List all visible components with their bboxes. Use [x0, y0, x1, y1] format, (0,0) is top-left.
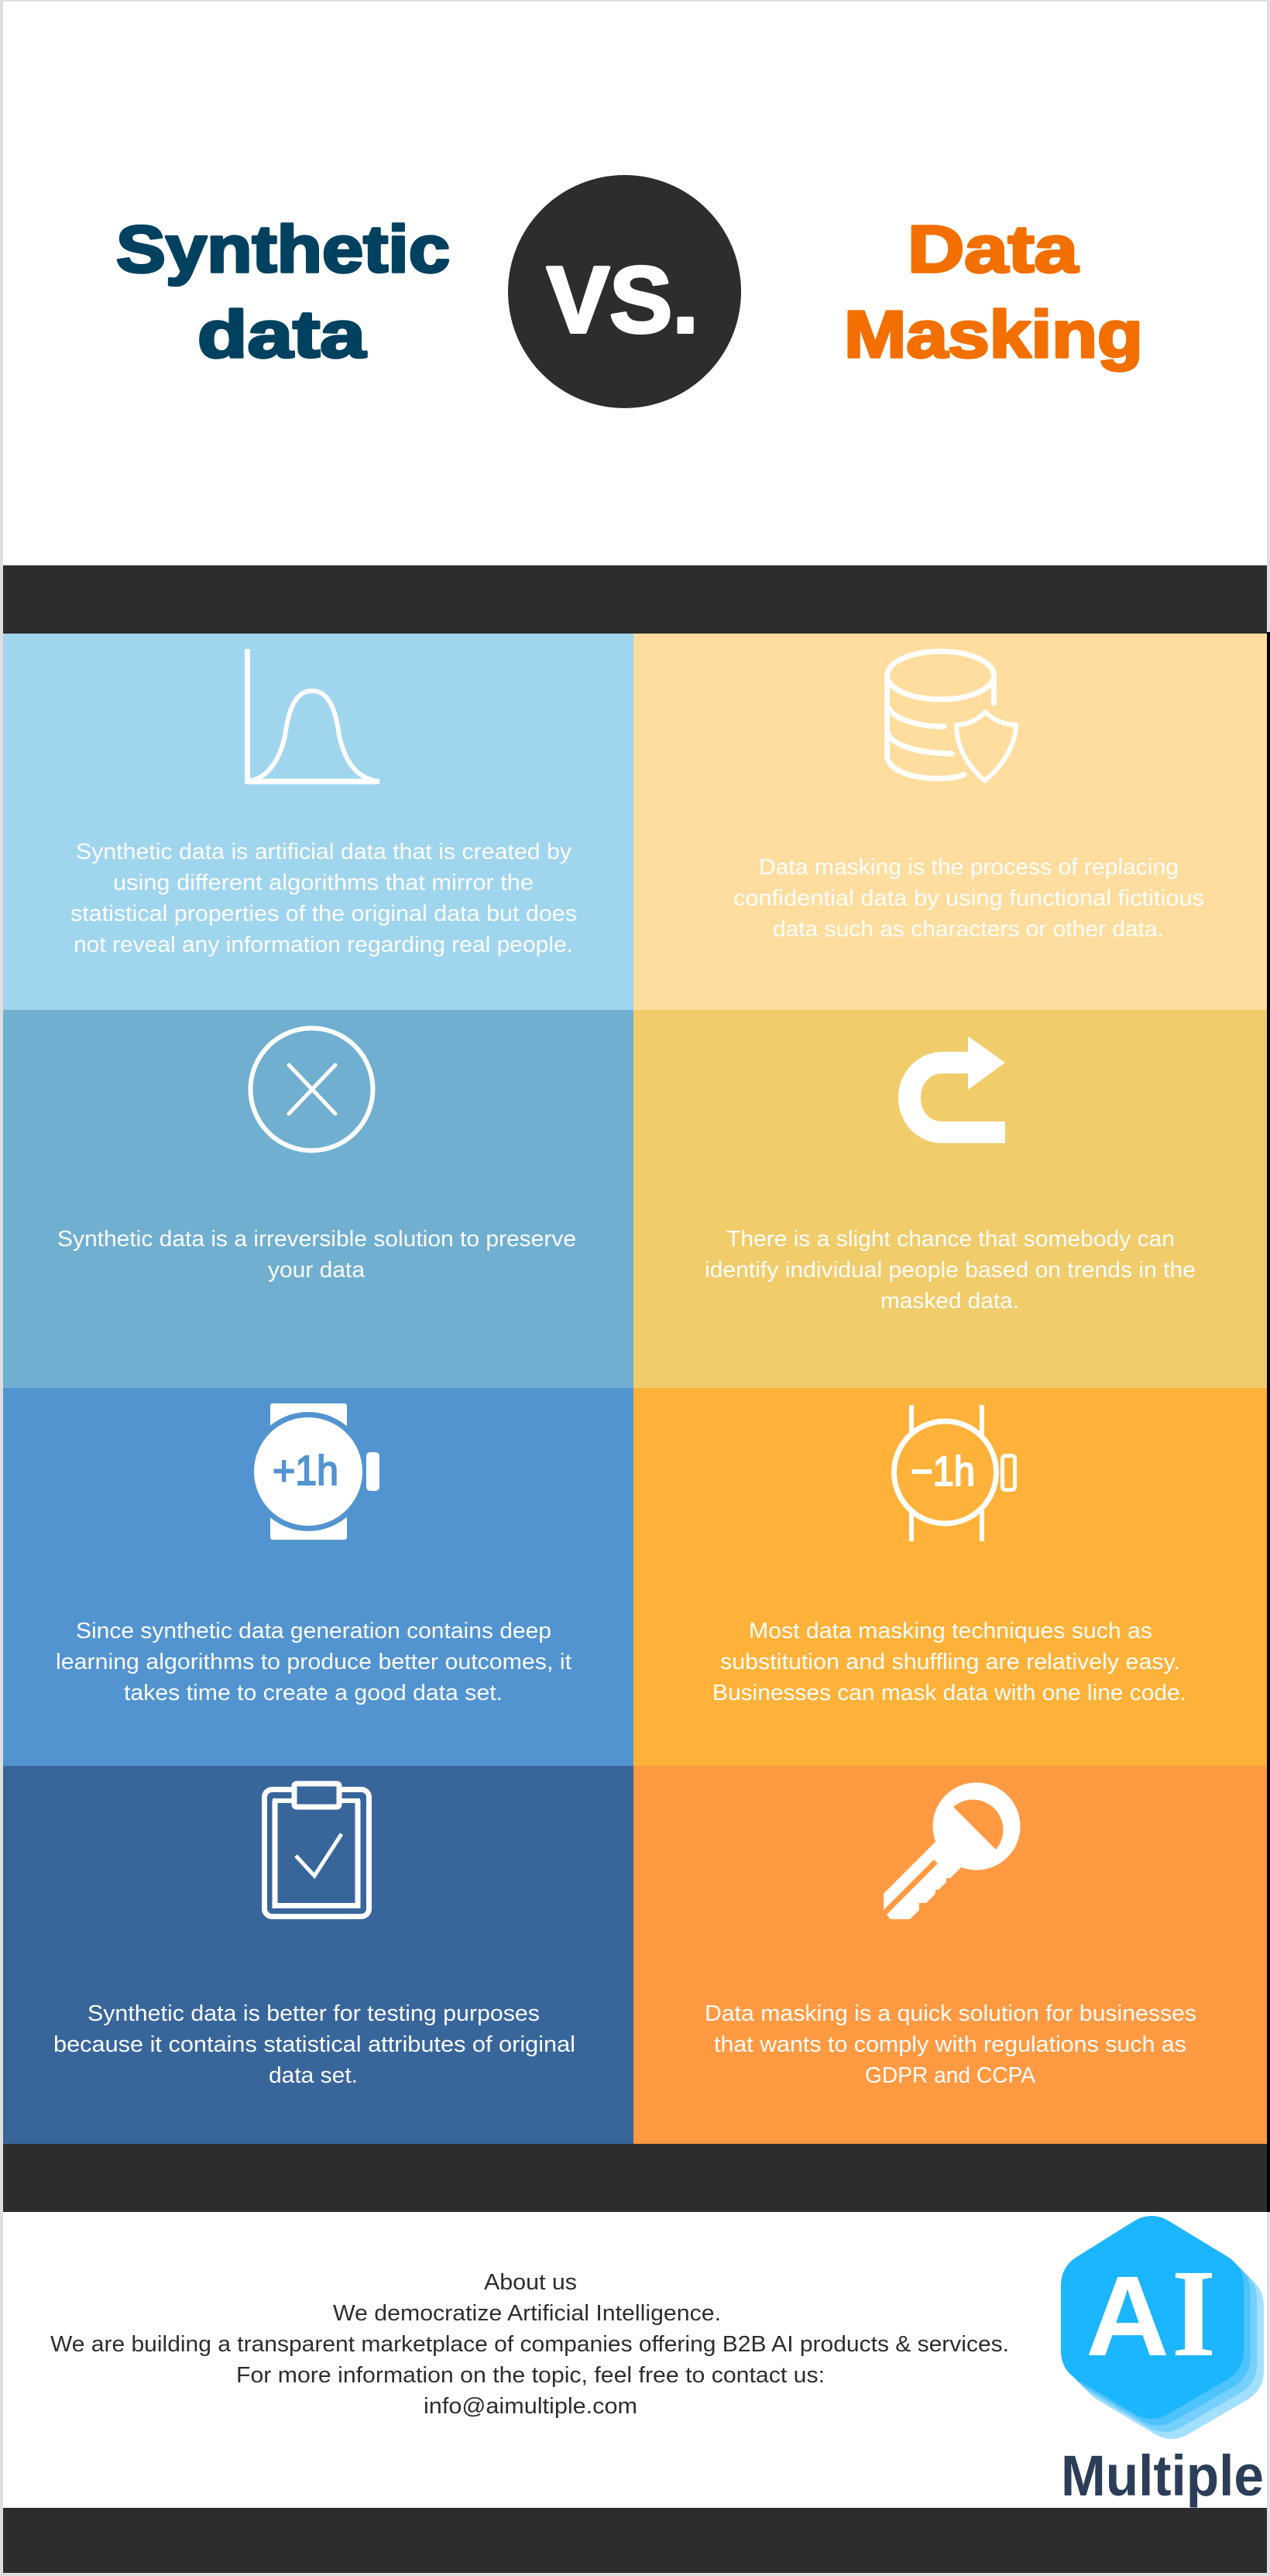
panel: better for testing: [3, 1766, 633, 2144]
text: irreversible: Synthetic data is a irreversible solution to preserve: [57, 1227, 576, 1252]
top dark band: [3, 565, 1267, 634]
text: about us: About us: [484, 2270, 577, 2295]
text: definition: statistical properties of the original data but does: [70, 902, 577, 926]
text: about us: For more information on the topic, feel free to contact us:: [236, 2363, 825, 2388]
panel: data masking definition: [633, 634, 1267, 1010]
text: time: [56, 1619, 572, 1705]
text: ease: [712, 1619, 1186, 1705]
text: risk: masked data.: [880, 1289, 1019, 1314]
text: definition: confidential data by using functional fictitious: [733, 886, 1204, 911]
icon: distribution curve: [248, 649, 379, 781]
text: irreversible: your data: [268, 1258, 366, 1283]
text: definition: data such as characters or other data.: [773, 917, 1164, 942]
text: definition: not reveal any information regarding real people.: [74, 933, 573, 957]
panel: irreversible: [3, 1010, 633, 1388]
panel: synthetic data definition: [3, 634, 633, 1010]
panel: footer about us: [3, 2212, 1267, 2508]
title: Synthetic data: [116, 213, 450, 372]
text: definition: using different algorithms that mirror the: [113, 871, 534, 895]
icon: clipboard with check: [265, 1784, 369, 1916]
text: compliance: GDPR and CCPA: [865, 2063, 1036, 2088]
text: time: Since synthetic data generation contains deep: [76, 1619, 551, 1643]
logo: AI Multiple: A: [1086, 2253, 1169, 2380]
badge: VS. circle: [508, 175, 741, 408]
text: testing: [53, 2001, 575, 2088]
text: definition: [70, 840, 577, 957]
title: Data Masking: Masking: [844, 298, 1143, 372]
text: compliance: [705, 2001, 1196, 2088]
text: testing: Synthetic data is better for testing purposes: [88, 2001, 540, 2026]
panel: regulation compliance: [633, 1766, 1267, 2144]
bottom dark band: [3, 2508, 1267, 2573]
text: about us: We democratize Artificial Intelligence.: [333, 2301, 721, 2326]
header panel: [3, 2, 1267, 565]
text: ease: Most data masking techniques such as: [749, 1619, 1152, 1643]
text: risk: identify individual people based on trends in the: [705, 1258, 1196, 1283]
text: definition: Synthetic data is artificial data that is created by: [76, 840, 572, 864]
text: ease: Businesses can mask data with one line code.: [712, 1681, 1186, 1705]
logo: AI Multiple: [1061, 2216, 1264, 2508]
title: Synthetic data: data: [197, 298, 366, 372]
text: testing: data set.: [269, 2063, 358, 2088]
icon: circled X: [251, 1029, 373, 1151]
icon: key: [884, 1783, 1021, 1919]
text: compliance: that wants to comply with regulations such as: [714, 2032, 1186, 2057]
panel: re-identification risk: [633, 1010, 1267, 1388]
text: time: learning algorithms to produce better outcomes, it: [56, 1650, 572, 1674]
text: about us: We are building a transparent marketplace of companies offering B2B AI products & services.: [50, 2332, 1009, 2357]
text: about us: info@aimultiple.com: [424, 2394, 637, 2419]
title: Synthetic data: Synthetic: [116, 213, 450, 287]
icon: watch plus one hour: +1h: [273, 1448, 338, 1494]
icon: watch minus one hour: [894, 1405, 1014, 1541]
panel: easy techniques: [633, 1388, 1267, 1766]
badge: VS. circle: VS.: [547, 247, 698, 352]
text: compliance: Data masking is a quick solution for businesses: [705, 2001, 1196, 2026]
text: testing: because it contains statistical attributes of original: [53, 2032, 575, 2057]
text: definition: Data masking is the process of replacing: [759, 855, 1179, 880]
icon: watch plus one hour: [249, 1403, 379, 1540]
text: irreversible: [57, 1227, 576, 1283]
text: definition: [733, 855, 1204, 942]
text: ease: substitution and shuffling are relatively easy.: [720, 1650, 1180, 1674]
lower dark band: [3, 2144, 1267, 2212]
icon: database with shield: [887, 651, 1016, 781]
title: Data Masking: [844, 213, 1143, 372]
title: Data Masking: Data: [908, 213, 1079, 287]
text: about us: [50, 2270, 1009, 2419]
text: time: takes time to create a good data set.: [124, 1681, 503, 1705]
panel: takes more time: [3, 1388, 633, 1766]
text: risk: There is a slight chance that somebody can: [726, 1227, 1175, 1252]
text: risk: [705, 1227, 1196, 1314]
logo: AI Multiple: I: [1172, 2245, 1216, 2383]
icon: watch minus one hour: −1h: [911, 1448, 975, 1495]
icon: return arrow: [898, 1036, 1005, 1143]
